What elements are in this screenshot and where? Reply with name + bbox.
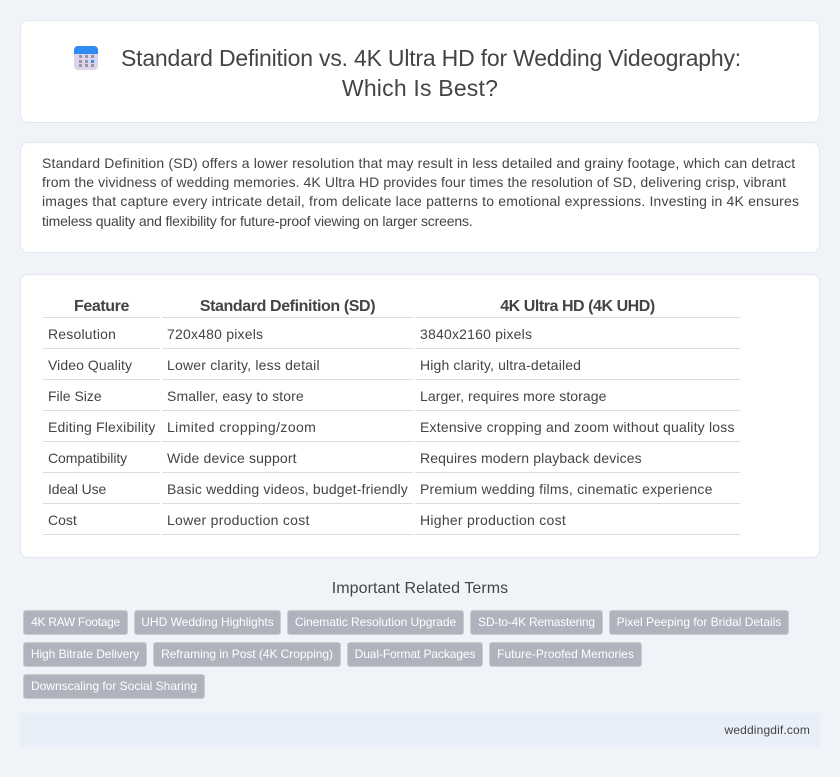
comparison table: Larger, requires more storage bbox=[420, 388, 606, 404]
title bbox=[121, 45, 741, 101]
comparison table: Wide device support bbox=[167, 450, 297, 466]
tag bbox=[609, 610, 789, 635]
comparison table: Video Quality bbox=[48, 357, 132, 373]
comparison table: Premium wedding films, cinematic experience bbox=[420, 481, 713, 497]
tag bbox=[489, 642, 642, 667]
comparison table: Compatibility bbox=[48, 450, 127, 466]
tag bbox=[287, 610, 464, 635]
title: Which Is Best? bbox=[342, 75, 498, 101]
tag: SD-to-4K Remastering bbox=[478, 615, 595, 629]
panel: title header bbox=[20, 20, 820, 123]
tag: 4K RAW Footage bbox=[31, 615, 120, 629]
icon: calendar bbox=[74, 46, 98, 70]
intro text bbox=[42, 154, 799, 229]
intro text: Standard Definition (SD) offers a lower resolution that may result in less detailed and grainy footage, which can detract bbox=[42, 154, 795, 170]
tag bbox=[23, 674, 205, 699]
footer bar bbox=[20, 713, 820, 747]
comparison table: Basic wedding videos, budget-friendly bbox=[167, 481, 408, 497]
tag: UHD Wedding Highlights bbox=[141, 615, 274, 629]
tag: Pixel Peeping for Bridal Details bbox=[617, 615, 781, 629]
comparison table: Smaller, easy to store bbox=[167, 388, 304, 404]
comparison table: Cost bbox=[48, 512, 77, 528]
tag bbox=[23, 642, 147, 667]
comparison table: Requires modern playback devices bbox=[420, 450, 642, 466]
comparison table: Editing Flexibility bbox=[48, 419, 156, 435]
comparison table: Lower production cost bbox=[167, 512, 310, 528]
tag bbox=[347, 642, 483, 667]
tag: Reframing in Post (4K Cropping) bbox=[161, 647, 333, 661]
intro text: from the vividness of wedding memories. 4K Ultra HD provides four times the resolution of SD, delivering crisp, vibrant bbox=[42, 174, 786, 190]
intro text: images that capture every intricate detail, from delicate lace patterns to emotional expressions. Investing in 4K ensures bbox=[42, 193, 799, 209]
comparison table: Limited cropping/zoom bbox=[167, 419, 316, 435]
tag bbox=[134, 610, 281, 635]
comparison table: Lower clarity, less detail bbox=[167, 357, 320, 373]
footer source: weddingdif.com bbox=[725, 723, 810, 737]
comparison table: 720x480 pixels bbox=[167, 326, 263, 342]
comparison table: Resolution bbox=[48, 326, 116, 342]
tag: Dual-Format Packages bbox=[355, 647, 475, 661]
tag bbox=[153, 642, 341, 667]
related terms heading: Important Related Terms bbox=[332, 580, 508, 597]
comparison table: Ideal Use bbox=[48, 481, 106, 497]
tag bbox=[470, 610, 603, 635]
title: Standard Definition vs. 4K Ultra HD for Wedding Videography: bbox=[121, 45, 741, 71]
comparison table: Extensive cropping and zoom without quality loss bbox=[420, 419, 735, 435]
tag: Downscaling for Social Sharing bbox=[31, 679, 197, 693]
panel: comparison table bbox=[20, 274, 820, 558]
table header: 4K: 4K Ultra HD (4K UHD) bbox=[500, 298, 655, 315]
comparison table: High clarity, ultra-detailed bbox=[420, 357, 581, 373]
comparison table bbox=[43, 298, 740, 535]
tag: Future-Proofed Memories bbox=[497, 647, 634, 661]
tag: High Bitrate Delivery bbox=[31, 647, 139, 661]
tag: Cinematic Resolution Upgrade bbox=[295, 615, 456, 629]
panel: intro bbox=[20, 142, 820, 253]
tag bbox=[23, 610, 128, 635]
comparison table: 3840x2160 pixels bbox=[420, 326, 532, 342]
comparison table: Higher production cost bbox=[420, 512, 566, 528]
related terms tags bbox=[23, 610, 789, 699]
comparison table: File Size bbox=[48, 388, 102, 404]
table header: feature: Feature bbox=[74, 298, 129, 315]
intro text: timeless quality and flexibility for future-proof viewing on larger screens. bbox=[42, 213, 473, 229]
table header: SD: Standard Definition (SD) bbox=[200, 298, 375, 315]
